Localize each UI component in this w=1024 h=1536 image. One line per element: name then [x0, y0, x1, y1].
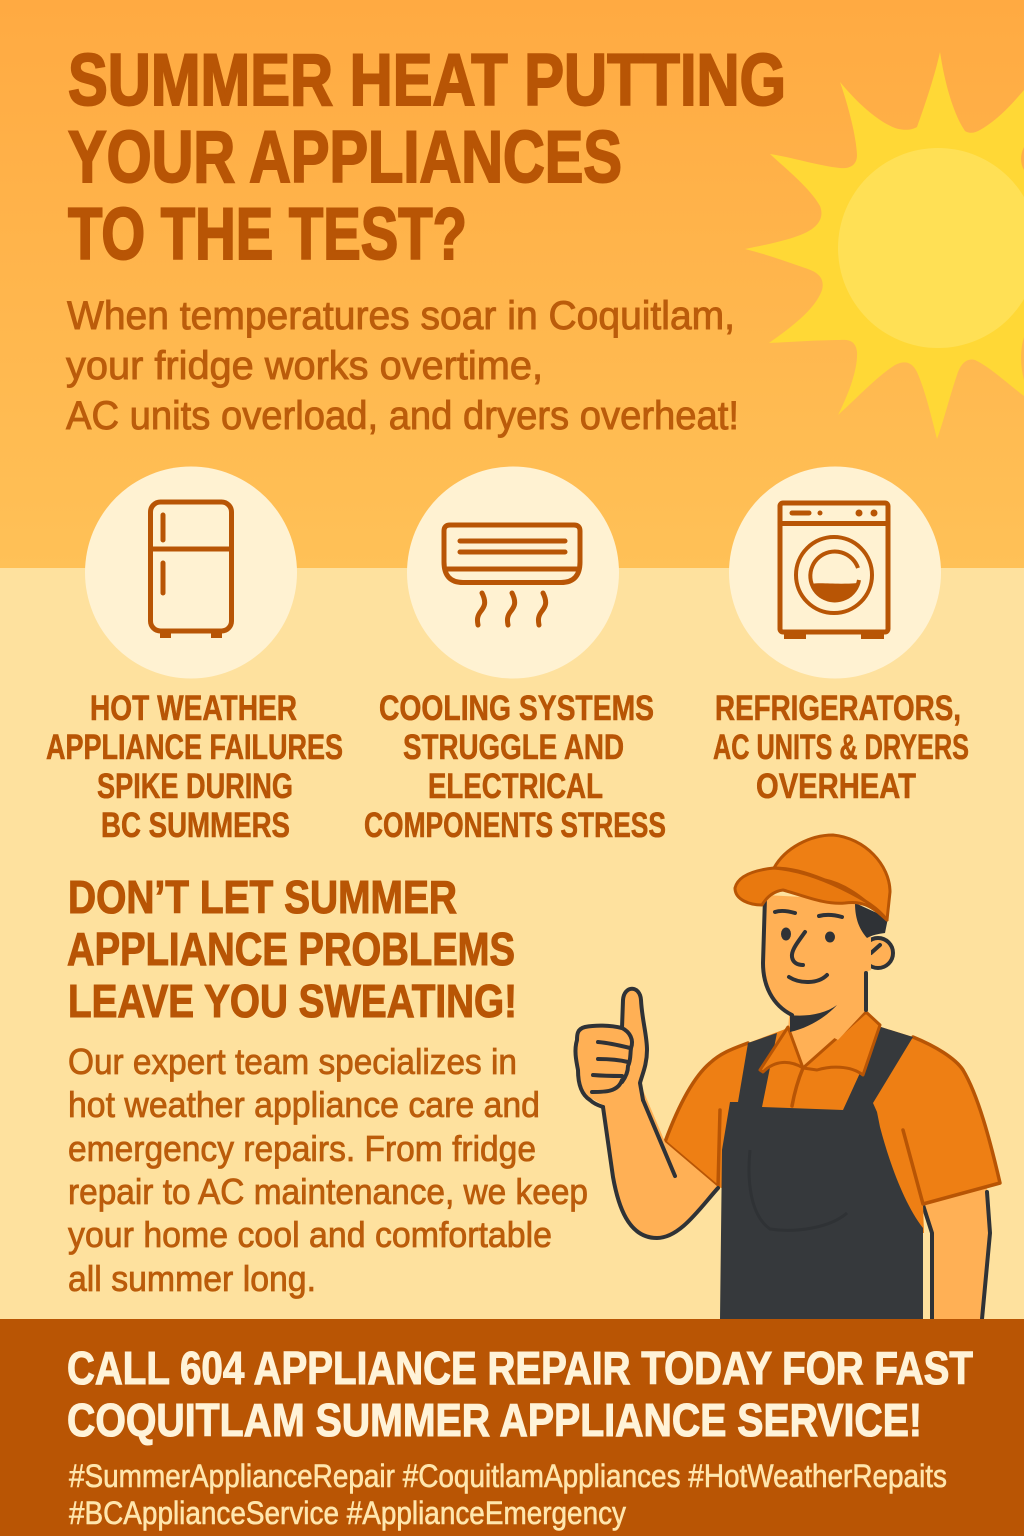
- overall apron: [720, 1027, 923, 1319]
- intro text: your fridge works overtime,: [66, 344, 543, 388]
- icon: dryer: [780, 503, 888, 639]
- label: hot weather failures: APPLIANCE FAILURES: [46, 728, 343, 767]
- icon: fridge: [150, 502, 232, 638]
- shirt: [665, 1012, 1000, 1233]
- body text: Our expert team specializes in: [68, 1041, 517, 1082]
- body text: your home cool and comfortable: [68, 1214, 552, 1255]
- title: SUMMER HEAT PUTTING: [68, 40, 786, 121]
- label: cooling systems: [364, 689, 666, 845]
- body text: emergency repairs. From fridge: [68, 1128, 536, 1169]
- cap: [735, 835, 890, 920]
- subheading: APPLIANCE PROBLEMS: [67, 923, 515, 975]
- illustration: repair technician giving thumbs up: [575, 835, 1000, 1319]
- hair: [855, 903, 888, 938]
- label: hot weather failures: BC SUMMERS: [101, 806, 290, 845]
- footer banner: [0, 1319, 1024, 1536]
- label: hot weather failures: SPIKE DURING: [97, 767, 293, 806]
- label: cooling systems: COOLING SYSTEMS: [379, 689, 654, 728]
- label: hot weather failures: HOT WEATHER: [90, 689, 297, 728]
- background: cream lower band: [0, 568, 1024, 1320]
- face: [763, 895, 871, 1040]
- label: cooling systems: ELECTRICAL: [428, 767, 603, 806]
- nose: [792, 932, 805, 965]
- footer background: [0, 1319, 1024, 1536]
- background: orange upper band: [0, 0, 1024, 568]
- panel: fridge: [46, 466, 343, 845]
- eyes and eyebrows: [775, 911, 842, 942]
- body text: all summer long.: [68, 1258, 316, 1299]
- head: [735, 835, 893, 1040]
- hashtags: #BCApplianceService #ApplianceEmergency: [69, 1495, 626, 1531]
- intro text: When temperatures soar in Coquitlam,: [67, 294, 735, 338]
- icon circle: dryer: [729, 466, 941, 678]
- title: [68, 40, 786, 275]
- label: hot weather failures: [46, 689, 343, 845]
- panel: air conditioner: [364, 466, 666, 845]
- right arm: [921, 1188, 990, 1319]
- icon: air conditioner: [444, 525, 580, 625]
- hashtags: [69, 1458, 947, 1531]
- ear: [863, 938, 893, 968]
- label: cooling systems: COMPONENTS STRESS: [364, 806, 666, 845]
- call to action: [67, 1342, 973, 1446]
- subheading: LEAVE YOU SWEATING!: [68, 975, 517, 1027]
- icon: sun: [745, 52, 1024, 439]
- intro text: [66, 294, 739, 438]
- title: YOUR APPLIANCES: [68, 117, 622, 198]
- face outline: [763, 897, 866, 1015]
- body text: [68, 1041, 588, 1299]
- icon circle: fridge: [85, 466, 297, 678]
- title: TO THE TEST?: [68, 194, 467, 275]
- body text: repair to AC maintenance, we keep: [68, 1171, 588, 1212]
- label: refrigerators, AC units and dryers: OVERHEAT: [756, 767, 916, 806]
- chin shadow: [790, 1005, 837, 1032]
- label: cooling systems: STRUGGLE AND: [403, 728, 624, 767]
- icon circle: air conditioner: [407, 466, 619, 678]
- collar: [760, 1012, 880, 1106]
- mouth: [789, 975, 827, 982]
- neck: [788, 1005, 880, 1072]
- subheading: DON’T LET SUMMER: [68, 871, 457, 923]
- label: refrigerators, AC units and dryers: REFRIGERATORS,: [715, 689, 961, 728]
- label: refrigerators, AC units and dryers: [713, 689, 969, 806]
- panel: washer and dryer: [713, 466, 969, 806]
- subheading: [67, 871, 517, 1027]
- left arm with thumbs up: [575, 989, 718, 1238]
- intro text: AC units overload, and dryers overheat!: [66, 394, 739, 438]
- body text: hot weather appliance care and: [68, 1084, 540, 1125]
